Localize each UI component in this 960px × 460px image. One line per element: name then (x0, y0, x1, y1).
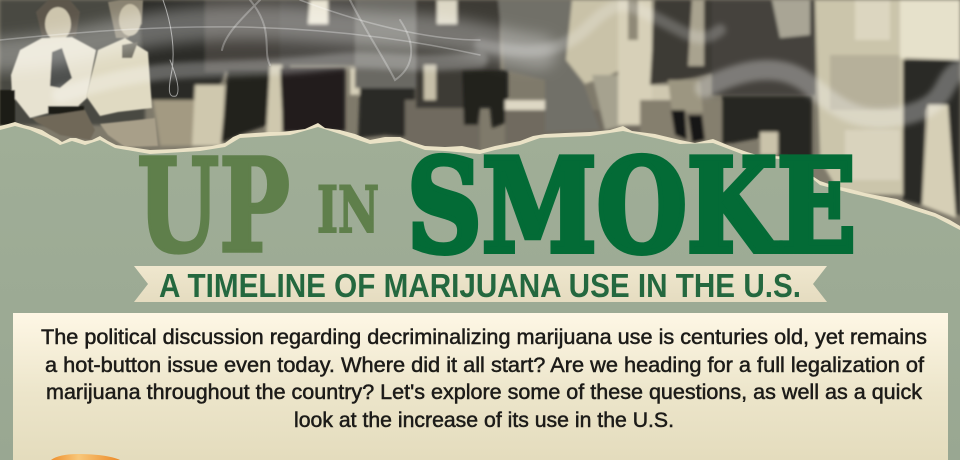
subtitle ribbon (134, 266, 827, 304)
intro paragraph (41, 326, 927, 432)
title word: SMOKE: SMOKE (407, 132, 856, 282)
pale ground patch (192, 85, 225, 146)
dark trousers 2 (280, 68, 345, 132)
boots (671, 110, 705, 143)
intro panel (13, 313, 948, 460)
white shirt fragment (308, 0, 328, 24)
torn paper edge (0, 122, 960, 246)
pale cuff (350, 68, 366, 95)
title (137, 131, 856, 282)
grey coat person (498, 0, 600, 132)
subtitle text: A TIMELINE OF MARIJUANA USE IN THE U.S. (159, 267, 801, 304)
dark trousers 1 (221, 70, 272, 143)
green paper background (0, 126, 960, 460)
white shirt centre (437, 0, 457, 24)
photo: vintage crowd of people (0, 0, 960, 235)
dark skirt woman (650, 0, 726, 85)
grey figure trousers (358, 85, 415, 138)
dark person right (712, 0, 815, 95)
woman in cream blouse (86, 0, 158, 147)
ground centre (405, 100, 480, 150)
left backdrop (0, 0, 145, 125)
intro paragraph: look at the increase of its use in the U.S. (294, 409, 674, 432)
dark standing figure coat (205, 0, 290, 72)
building (618, 0, 652, 125)
icon: top of orange joint (51, 454, 120, 460)
dark figures upper centre (416, 0, 500, 108)
intro paragraph: The political discussion regarding decriminalizing marijuana use is centuries old, yet remains (41, 326, 927, 349)
intro paragraph: marijuana throughout the country? Let's explore some of these questions, as well as a quick (46, 381, 923, 404)
title word: IN: IN (317, 173, 379, 248)
pale gap (266, 65, 282, 135)
dark legs (462, 70, 508, 128)
plaid dress woman (815, 0, 905, 195)
grey jacket (355, 0, 418, 88)
light gap between legs (922, 105, 956, 218)
title word: UP: UP (137, 131, 290, 282)
grey coat centre (280, 0, 375, 65)
figure legs, tan (153, 100, 205, 146)
cream shorts figure (566, 0, 625, 84)
smoke wisps (0, 0, 960, 118)
intro paragraph: a hot-button issue even today. Where did it all start? Are we heading for a full legalization of (45, 354, 924, 377)
dark dress figure (138, 0, 225, 104)
woman in white blouse with tie (0, 0, 96, 140)
pale column centre (424, 65, 436, 100)
jeans (903, 60, 960, 215)
pale street (505, 100, 545, 110)
right person white top (900, 0, 960, 60)
